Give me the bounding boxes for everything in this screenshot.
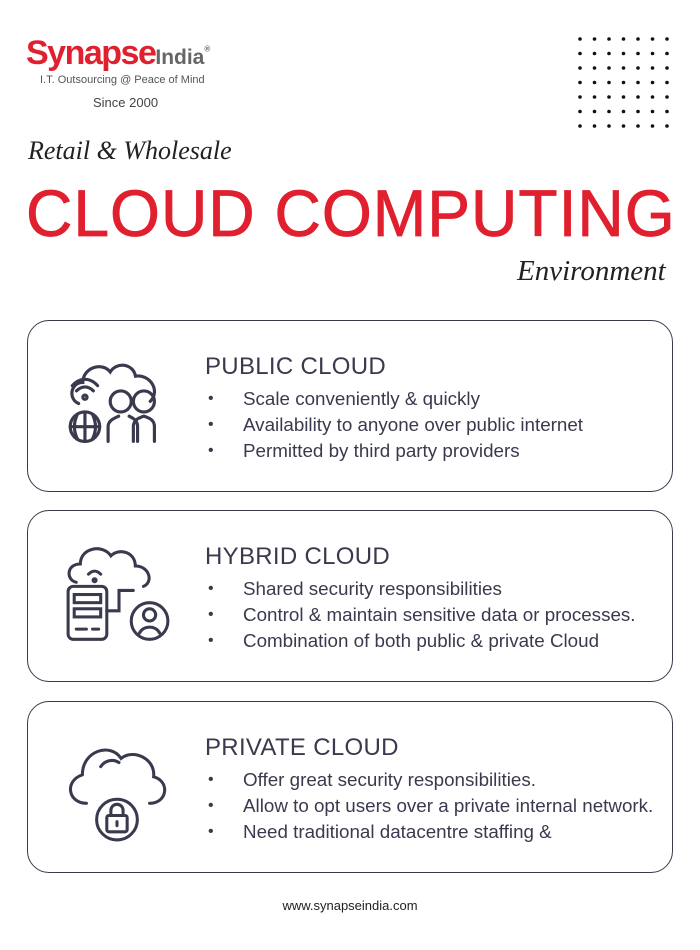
- bullet list: [208, 388, 583, 461]
- bullet list: Scale conveniently & quickly: [243, 388, 480, 409]
- subtitle: Retail & Wholesale: Retail & Wholesale: [28, 136, 232, 165]
- subtitle: Environment: Environment: [517, 255, 666, 287]
- icon: private cloud: [68, 748, 166, 842]
- panel: hybrid cloud: [27, 510, 673, 682]
- footer url: www.synapseindia.com: [282, 898, 418, 913]
- bullet list: [208, 769, 653, 842]
- icon: public cloud: [68, 364, 156, 443]
- logo: [26, 34, 210, 110]
- panel: public cloud: [27, 320, 673, 492]
- bullet list: Need traditional datacentre staffing &: [243, 821, 552, 842]
- bullet list: Availability to anyone over public internet: [243, 414, 583, 435]
- logo: Since 2000: [93, 95, 158, 110]
- heading: PRIVATE CLOUD: [205, 734, 399, 761]
- bullet list: Allow to opt users over a private internal network.: [243, 795, 653, 816]
- bullet list: Shared security responsibilities: [243, 578, 502, 599]
- heading: PUBLIC CLOUD: [205, 353, 386, 380]
- logo: SynapseIndia®: [26, 34, 209, 72]
- logo: I.T. Outsourcing @ Peace of Mind: [40, 74, 205, 86]
- bullet list: Control & maintain sensitive data or processes.: [243, 604, 636, 625]
- title: CLOUD COMPUTING: [26, 176, 676, 250]
- icon: hybrid cloud: [66, 547, 170, 641]
- panel: private cloud: [27, 701, 673, 873]
- bullet list: Offer great security responsibilities.: [243, 769, 536, 790]
- bullet list: Permitted by third party providers: [243, 440, 520, 461]
- bullet list: Combination of both public & private Cloud: [243, 630, 599, 651]
- dot grid: [578, 37, 669, 128]
- heading: HYBRID CLOUD: [205, 543, 390, 570]
- bullet list: [208, 578, 636, 651]
